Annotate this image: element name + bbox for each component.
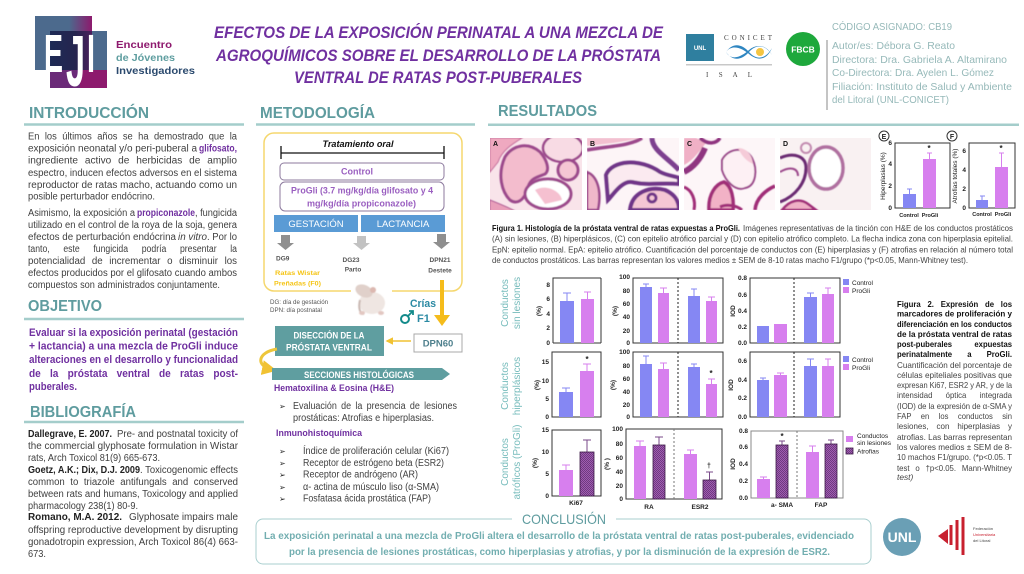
chart: row 2 RA ESR2: 60 — [623, 376, 630, 383]
title: VENTRAL DE RATAS POST-PUBERALES — [294, 68, 583, 87]
title: EFECTOS DE LA EXPOSICIÓN PERINATAL A UNA MEZCLA DE — [214, 23, 664, 42]
text: introducción: reproductor de ratas macho, actuando como un — [28, 180, 237, 191]
legend: row 1: Control — [852, 280, 874, 287]
chart: row 1 Ki67: 8 — [546, 282, 550, 289]
panel: treatment diagram: Parto — [345, 266, 361, 274]
logo: Federación Universitaria del Litoral: Federación — [973, 526, 993, 531]
chart: row 2 Ki67: (%) — [534, 380, 541, 390]
chart: panel E hiperplasias: E — [882, 134, 887, 141]
chart: row 1 SMA FAP: IOD — [730, 305, 737, 317]
logo: Encuentro de Jóvenes Investigadores: J — [66, 22, 85, 102]
text: methods list: Hematoxilina & Eosina (H&E) — [274, 383, 394, 393]
text: methods list: Receptor de andrógeno (AR) — [303, 470, 418, 480]
heading: metodología: METODOLOGÍA — [260, 103, 375, 122]
panel: treatment diagram: Ratas Wistar — [275, 270, 321, 277]
image: histology D — [780, 138, 871, 210]
text: bibliografía: between rats and humans, Toxicology and applied — [28, 489, 238, 500]
legend: row 3: sin lesiones — [857, 440, 892, 447]
caption: figura 2: intensidad óptica integrada — [897, 390, 1012, 400]
chart: row 3 Ki67: 0 — [545, 493, 549, 500]
panel: treatment diagram: LACTANCIA — [377, 219, 430, 230]
chart: row 1 SMA FAP: 0.6 — [738, 292, 747, 299]
chart: row 1 RA ESR2: 80 — [623, 288, 630, 295]
box: DPN60: DPN60 — [423, 338, 453, 350]
panel: treatment diagram: mg/kg/día propiconazole) — [307, 198, 416, 208]
text: methods list: Receptor de estrógeno beta (ESR2) — [303, 458, 444, 469]
caption: figura 2: post-puberales expuestas — [897, 339, 1012, 349]
legend: row 2 — [843, 356, 874, 372]
chart: panel E hiperplasias: * — [927, 144, 931, 153]
chart: panel F atrofias: 2 — [962, 186, 966, 193]
chart: panel F atrofias — [947, 131, 1015, 218]
logo: Federación Universitaria del Litoral: del Litoral — [973, 538, 990, 543]
chart: row 1 RA ESR2: 20 — [623, 328, 630, 335]
legend: row 3: Atrofias — [857, 448, 880, 456]
logo: Encuentro de Jóvenes Investigadores: de Jóvenes — [116, 52, 175, 64]
caption: figura 2: lesiones, con hiperplasias y — [897, 421, 1013, 431]
logo: UNL CONICET ISAL: CONICET — [724, 34, 773, 42]
title — [214, 23, 664, 87]
chart: row 3 Ki67: 5 — [545, 471, 549, 478]
row label: conductos atróficos — [500, 424, 523, 500]
authors block: Filiación: Instituto de Salud y Ambiente — [832, 81, 1012, 93]
text: introducción: posible perturbador endócrino. — [28, 192, 155, 202]
text: methods list: ➢ — [279, 470, 286, 480]
image: histology B: B — [590, 141, 595, 148]
chart: row 3 SMA FAP: 0.8 — [739, 428, 748, 435]
logo: Encuentro de Jóvenes Investigadores: Encuentro — [116, 39, 172, 51]
caption: figura 2: test o †p<0.05. Mann-Whitney — [897, 463, 1013, 473]
box: DPN60 — [414, 334, 462, 352]
icon: rat — [353, 282, 385, 315]
chart: row 2 Ki67: 0 — [545, 414, 549, 421]
caption: figura 2: los valores medios ± SEM de 8- — [897, 442, 1012, 452]
chart: panel F atrofias: F — [950, 134, 955, 141]
heading: objetivo: OBJETIVO — [28, 298, 102, 315]
chart: row 3 Ki67: 15 — [542, 427, 549, 434]
chart: row 2 Ki67: 5 — [545, 396, 549, 403]
caption: figura 2: test) — [897, 472, 913, 482]
logo: Encuentro de Jóvenes Investigadores: Investigadores — [116, 65, 195, 77]
logo: UNL CONICET ISAL: I S A L — [706, 71, 752, 79]
chart: row 2 SMA FAP: 0.0 — [738, 414, 747, 421]
text: introducción: tanto, este fungicida podría presentar la — [28, 244, 237, 255]
chart: row 2 RA ESR2 — [610, 349, 723, 421]
chart: row 3 RA ESR2: (% ) — [604, 458, 611, 470]
authors block — [827, 20, 1012, 110]
image: histology D: D — [783, 141, 788, 148]
caption: figura 2: atrofias. Las barras representan — [897, 432, 1012, 442]
chart: row 1 RA ESR2 — [612, 274, 723, 347]
text: introducción: potencialidad de incrementar o disminuir los — [28, 256, 237, 267]
chart: row 1 SMA FAP: 0.0 — [738, 340, 747, 347]
text: introducción: espectro, inducen efectos adversos en el sistema — [28, 168, 237, 179]
chart: row 1 RA ESR2: 0 — [626, 340, 630, 347]
chart: row 3 RA ESR2: 40 — [616, 469, 623, 476]
chart: panel E hiperplasias: 2 — [888, 183, 892, 190]
logo: UNL CONICET ISAL — [686, 34, 773, 79]
chart: row 3 RA ESR2 — [604, 426, 722, 511]
row label: conductos hiperplásicos: hiperplásicos — [512, 357, 523, 415]
chart: row 3 SMA FAP: 0.0 — [739, 495, 748, 502]
logo: Encuentro de Jóvenes Investigadores: I — [87, 24, 95, 84]
caption: figura 2: 10 machos F1/grupo. (*p<0.05. T — [897, 452, 1012, 462]
image: histology A — [490, 138, 582, 210]
text: objetivo: de la próstata ventral de ratas post- — [29, 368, 238, 380]
text: methods list: Índice de proliferación celular (Ki67) — [303, 444, 449, 457]
banner: secciones histológicas: SECCIONES HISTOLÓGICAS — [304, 369, 414, 381]
caption: figura 1: de conductos prostáticos. Las barras representan los valores medios ± SEM de 8-10 ratas macho F1/grupo (*p<0.05, Mann-Whitney test). — [492, 255, 968, 265]
text: bibliografía: Goetz, A.K.; Dix, D.J. 2009 — [28, 465, 140, 476]
legend: abbreviations: DG: día de gestación — [270, 299, 329, 306]
chart: row 3 SMA FAP: 0.6 — [739, 444, 748, 451]
caption: figura 1 — [492, 223, 1013, 265]
chart: row 3 SMA FAP: FAP — [815, 502, 828, 509]
text: bibliografía — [28, 429, 239, 560]
text: introducción: utilizado en el control de la roya de la soja, genera — [28, 220, 237, 231]
legend: row 2: Control — [852, 357, 874, 364]
label: crías F1 — [401, 298, 436, 325]
text: introducción: , fungicida — [195, 208, 237, 219]
chart: row 2 SMA FAP: 0.2 — [738, 395, 747, 402]
text: bibliografía: 673. — [28, 549, 46, 560]
legend: row 2: ProGli — [852, 365, 870, 372]
text: introducción: Asimismo, la exposición a — [28, 208, 135, 219]
row label: conductos atróficos: Conductos — [500, 438, 511, 486]
panel: conclusión: por la presencia de lesiones prostáticas, como hiperplasias y atrofias, y por la disminución de la expresión de ESR2. — [289, 547, 830, 558]
panel: treatment diagram: GESTACIÓN — [288, 219, 344, 230]
legend: abbreviations — [270, 299, 329, 314]
caption: figura 2: expresan Ki67, ESR2 y AR, y de la — [897, 380, 1012, 390]
caption: figura 1: (A) sin lesiones, (B) hiperplásicos, (C) con epitelio atrófico parcial y (D) con epitelio atrófico completo. La flecha indica zona con hiperplasia epitelial. — [492, 234, 1013, 244]
heading: resultados: RESULTADOS — [498, 103, 597, 120]
chart: panel F atrofias: Atrofias totales (%) — [952, 149, 959, 203]
panel: treatment diagram: Control — [341, 166, 373, 176]
caption: figura 2: células epiteliales positivas que — [897, 370, 1012, 380]
text: objetivo: alteraciones en el desarrollo y funcionalidad — [29, 354, 238, 366]
panel: treatment diagram: Tratamiento oral — [322, 139, 394, 149]
chart: row 3 SMA FAP: * — [780, 432, 784, 441]
text: bibliografía: . Toxicogenomic effects — [140, 465, 238, 476]
text: introducción: En los últimos años se ha demostrado que la — [28, 132, 237, 142]
chart: row 1 RA ESR2: (%) — [612, 306, 619, 316]
caption: figura 1: Figura 1. Histología de la próstata ventral de ratas expuestas a ProGli. — [492, 223, 740, 233]
chart: row 2 Ki67: * — [585, 355, 589, 364]
text: methods list: Evaluación de la presencia de lesiones — [293, 401, 457, 412]
logo: Federación Universitaria del Litoral — [938, 517, 996, 555]
chart: panel F atrofias: 0 — [962, 205, 966, 212]
text: introducción: efectos de perturbación endócrina — [28, 232, 176, 243]
authors block: Autor/es: Débora G. Reato — [832, 40, 955, 52]
logo: FBCB: FBCB — [791, 44, 815, 54]
text: methods list: Inmunohistoquímica — [276, 428, 363, 438]
chart: row 1 Ki67: (%) — [536, 306, 543, 316]
row label: conductos atróficos: atróficos (ProGli) — [512, 424, 523, 500]
chart: row 1 Ki67: 2 — [546, 325, 550, 332]
caption: figura 2: perinatalmente a ProGli. — [897, 349, 1012, 359]
chart: row 3 RA ESR2: RA — [644, 504, 654, 511]
text: introducción: . Por lo — [207, 232, 237, 243]
logo: FBCB — [786, 32, 820, 66]
legend: row 1 — [843, 279, 874, 295]
chart: row 2 SMA FAP: IOD — [728, 379, 735, 391]
text: introducción: propiconazole — [137, 208, 195, 219]
arrow: DPN60 to dissection — [387, 340, 411, 342]
heading: introducción: INTRODUCCIÓN — [29, 103, 149, 122]
text: methods list: α- actina de músculo liso (α-SMA) — [303, 482, 439, 493]
banner: secciones histológicas — [272, 368, 450, 381]
row label: conductos sin lesiones: sin lesiones — [512, 277, 523, 329]
caption: figura 2: FAP en los conductos sin — [897, 411, 1012, 421]
chart: row 2 SMA FAP — [728, 352, 840, 421]
caption: figura 2: de la próstata ventral de ratas — [897, 329, 1012, 339]
chart: row 2 RA ESR2: 40 — [623, 389, 630, 396]
chart: row 3 RA ESR2: 80 — [616, 441, 623, 448]
chart: row 2 RA ESR2: 100 — [619, 349, 630, 356]
title: AGROQUÍMICOS SOBRE EL DESARROLLO DE LA PRÓSTATA — [215, 46, 661, 65]
chart: row 2 RA ESR2: 0 — [626, 414, 630, 421]
caption: figura 2: (IOD) de la expresión de α-SMA y — [897, 401, 1013, 411]
text: methods list: prostáticas: Atrofias e hiperplasias. — [293, 413, 434, 424]
caption: figura 2: diferenciación en los conductos — [897, 319, 1012, 329]
caption: figura 2: marcadores de proliferación y — [897, 308, 1012, 318]
chart: row 3 RA ESR2: 60 — [616, 455, 623, 462]
label: crías F1: Crías — [410, 298, 436, 310]
text: methods list: ➢ — [279, 483, 286, 492]
caption: figura 2: Cuantificación del porcentaje de — [897, 360, 1012, 370]
chart: panel E hiperplasias: 0 — [888, 205, 892, 212]
chart: row 3 RA ESR2: 20 — [616, 483, 623, 490]
image: histology C: C — [687, 141, 692, 148]
chart: row 1 RA ESR2: 40 — [623, 314, 630, 321]
logo: Encuentro de Jóvenes Investigadores: E — [44, 24, 63, 84]
chart: row 1 SMA FAP: 0.8 — [738, 275, 747, 282]
chart: row 3 Ki67: (%) — [532, 458, 539, 468]
chart: row 1 Ki67: 0 — [546, 340, 550, 347]
authors block: Co-Directora: Dra. Ayelen L. Gómez — [832, 67, 994, 79]
text: introducción: exposición neonatal y/o peri-puberal a — [28, 144, 197, 154]
legend: abbreviations: DPN: día postnatal — [270, 307, 322, 314]
caption: figura 2: Figura 2. Expresión de los — [897, 299, 1012, 309]
text: bibliografía: Pre- and postnatal toxicity of — [117, 429, 238, 440]
heading: bibliografía: BIBLIOGRAFÍA — [30, 402, 136, 421]
text: introducción — [28, 132, 237, 291]
authors block: CÓDIGO ASIGNADO: CB19 — [832, 20, 952, 33]
text: objetivo: puberales. — [29, 381, 77, 393]
chart: row 1 SMA FAP — [730, 275, 840, 347]
text: bibliografía: the commercial glyphosate formulation in Wistar — [28, 441, 239, 452]
chart: row 3 Ki67: Ki67 — [569, 500, 583, 507]
legend: row 3: Conductos — [857, 433, 889, 440]
chart: row 2 RA ESR2: (%) — [610, 380, 617, 390]
box: disección de la próstata ventral: PRÓSTATA VENTRAL — [286, 342, 372, 354]
authors block: Directora: Dra. Gabriela A. Altamirano — [832, 54, 1007, 66]
chart: row 2 Ki67: 15 — [542, 359, 549, 366]
logo: Encuentro de Jóvenes Investigadores — [35, 16, 195, 102]
text: introducción: ingrediente activo de herbicidas de amplio — [28, 156, 237, 166]
chart: row 2 SMA FAP: 0.6 — [738, 358, 747, 365]
chart: row 2 RA ESR2: * — [709, 369, 713, 378]
text: introducción: efectos producidos por el glifosato cuando ambos — [28, 268, 237, 279]
text: methods list: Fosfatasa ácida prostática (FAP) — [303, 494, 431, 504]
logo: UNL: UNL — [888, 529, 917, 545]
chart: panel E hiperplasias — [879, 131, 950, 219]
text: introducción: glifosato, — [199, 144, 237, 154]
image: histology A: A — [493, 141, 498, 148]
arrow: offspring yellow — [434, 280, 450, 326]
panel: treatment diagram: DPN21 — [430, 257, 451, 264]
legend: row 3 — [846, 433, 892, 456]
chart: panel F atrofias: * — [999, 144, 1003, 153]
text: objetivo — [29, 327, 238, 393]
caption: figura 1: EpN: epitelio normal. EpA: epitelio atrófico. Cuantificación del porcentaje de conductos con (E) hiperplasias y (F) atrofias en relación al número total — [492, 244, 1013, 254]
chart: row 2 SMA FAP: 0.4 — [738, 377, 747, 384]
chart: panel E hiperplasias: Hiperplasias (%) — [880, 152, 887, 200]
authors block: del Litoral (UNL-CONICET) — [832, 94, 949, 106]
logo: UNL — [883, 518, 921, 556]
text: bibliografía: rats, Arch Toxicol 81(9) 665-673. — [28, 453, 160, 464]
chart: row 3 SMA FAP: 0.2 — [739, 478, 748, 485]
chart: row 2 Ki67: 10 — [542, 378, 549, 385]
image: histology B — [587, 138, 679, 210]
chart: row 2 RA ESR2: 20 — [623, 402, 630, 409]
chart: row 3 RA ESR2: † — [707, 463, 711, 470]
chart: row 3 RA ESR2: ESR2 — [692, 504, 709, 511]
chart: panel E hiperplasias: 4 — [888, 161, 892, 168]
chart: panel E hiperplasias: 6 — [888, 140, 892, 147]
chart: row 3 SMA FAP: IOD — [730, 458, 737, 470]
chart: row 3 SMA FAP: a- SMA — [771, 502, 793, 509]
chart: row 3 RA ESR2: 100 — [612, 426, 623, 433]
chart: panel F atrofias: 6 — [962, 148, 966, 155]
text: methods list: ➢ — [279, 459, 286, 468]
chart: panel E hiperplasias: Control — [899, 213, 919, 219]
logo: Federación Universitaria del Litoral: Universitaria — [973, 532, 996, 537]
chart: row 3 SMA FAP — [730, 428, 843, 509]
chart: row 1 SMA FAP: 0.4 — [738, 308, 747, 315]
logo: UNL CONICET ISAL: UNL — [694, 46, 706, 52]
chart: row 3 SMA FAP: 0.4 — [739, 461, 748, 468]
text: introducción: in vitro — [178, 232, 207, 243]
chart: row 3 RA ESR2: 0 — [619, 496, 623, 503]
panel: treatment diagram: DG23 — [343, 257, 360, 264]
box: disección de la próstata ventral: DISECCIÓN DE LA — [294, 330, 365, 342]
row label: conductos sin lesiones — [500, 277, 523, 329]
label: crías F1: F1 — [417, 313, 430, 325]
text: objetivo: Evaluar si la exposición perinatal (gestación — [29, 327, 238, 339]
panel: conclusión: CONCLUSIÓN — [522, 511, 606, 527]
text: bibliografía: offspring reproductive development by disrupting — [28, 525, 238, 536]
panel: treatment diagram: ProGli (3.7 mg/kg/día glifosato y 4 — [291, 186, 433, 196]
image: histology C — [684, 138, 775, 210]
text: bibliografía: common to triazole antifungals and conserved — [28, 477, 238, 488]
caption: figura 2 — [897, 299, 1013, 482]
text: bibliografía: pharmacology 238(1) 80-9. — [28, 501, 138, 512]
chart: row 1 Ki67: 4 — [546, 311, 550, 318]
chart: row 3 Ki67 — [532, 427, 601, 507]
chart: row 2 RA ESR2: 80 — [623, 363, 630, 370]
text: bibliografía: Dallegrave, E. 2007. — [28, 429, 112, 440]
panel: conclusión — [256, 511, 871, 564]
chart: row 1 Ki67: 6 — [546, 296, 550, 303]
arrow: curved yellow — [261, 349, 277, 370]
panel: treatment diagram: DG9 — [276, 256, 290, 262]
box: disección de la próstata ventral — [275, 326, 384, 356]
chart: row 1 SMA FAP: 0.2 — [738, 324, 747, 331]
chart: panel E hiperplasias: ProGli — [922, 213, 939, 219]
row label: conductos hiperplásicos: Conductos — [500, 362, 511, 410]
chart: row 1 RA ESR2: 100 — [619, 274, 630, 281]
text: bibliografía: gonadotropin expression, Arch Toxicol 86(4) 663- — [28, 537, 238, 548]
chart: row 1 RA ESR2: 60 — [623, 301, 630, 308]
text: methods list: ➢ — [279, 494, 286, 504]
panel: treatment diagram: Preñadas (F0) — [274, 280, 321, 288]
chart: row 3 Ki67: 10 — [542, 449, 549, 456]
panel: treatment diagram: Destete — [428, 268, 452, 274]
panel: conclusión: La exposición perinatal a una mezcla de ProGli altera el desarrollo de la próstata ventral de ratas post-puberales, evidenciado — [264, 531, 854, 542]
text: methods list: ➢ — [279, 402, 286, 411]
chart: panel F atrofias: ProGli — [995, 212, 1012, 218]
row label: conductos sin lesiones: Conductos — [500, 279, 511, 327]
chart: panel F atrofias: Control — [972, 212, 992, 218]
legend: row 1: ProGli — [852, 288, 870, 295]
chart: row 1 Ki67 — [536, 278, 601, 347]
panel: treatment diagram — [264, 133, 462, 291]
text: objetivo: + lactancia) a una mezcla de ProGli induce — [29, 340, 238, 352]
text: introducción: compuestos son administrados conjuntamente. — [28, 280, 220, 291]
chart: panel F atrofias: 4 — [962, 167, 966, 174]
text: bibliografía: Romano, M.A. 2012. — [28, 512, 122, 523]
text: bibliografía: Glyphosate impairs male — [129, 512, 238, 523]
chart: row 2 Ki67 — [534, 352, 601, 421]
row label: conductos hiperplásicos — [500, 357, 523, 415]
caption: figura 1: Imágenes representativas de la tinción con H&E de los conductos prostáticos — [743, 223, 1013, 233]
text: methods list: ➢ — [279, 447, 286, 456]
text: methods list — [274, 383, 457, 504]
